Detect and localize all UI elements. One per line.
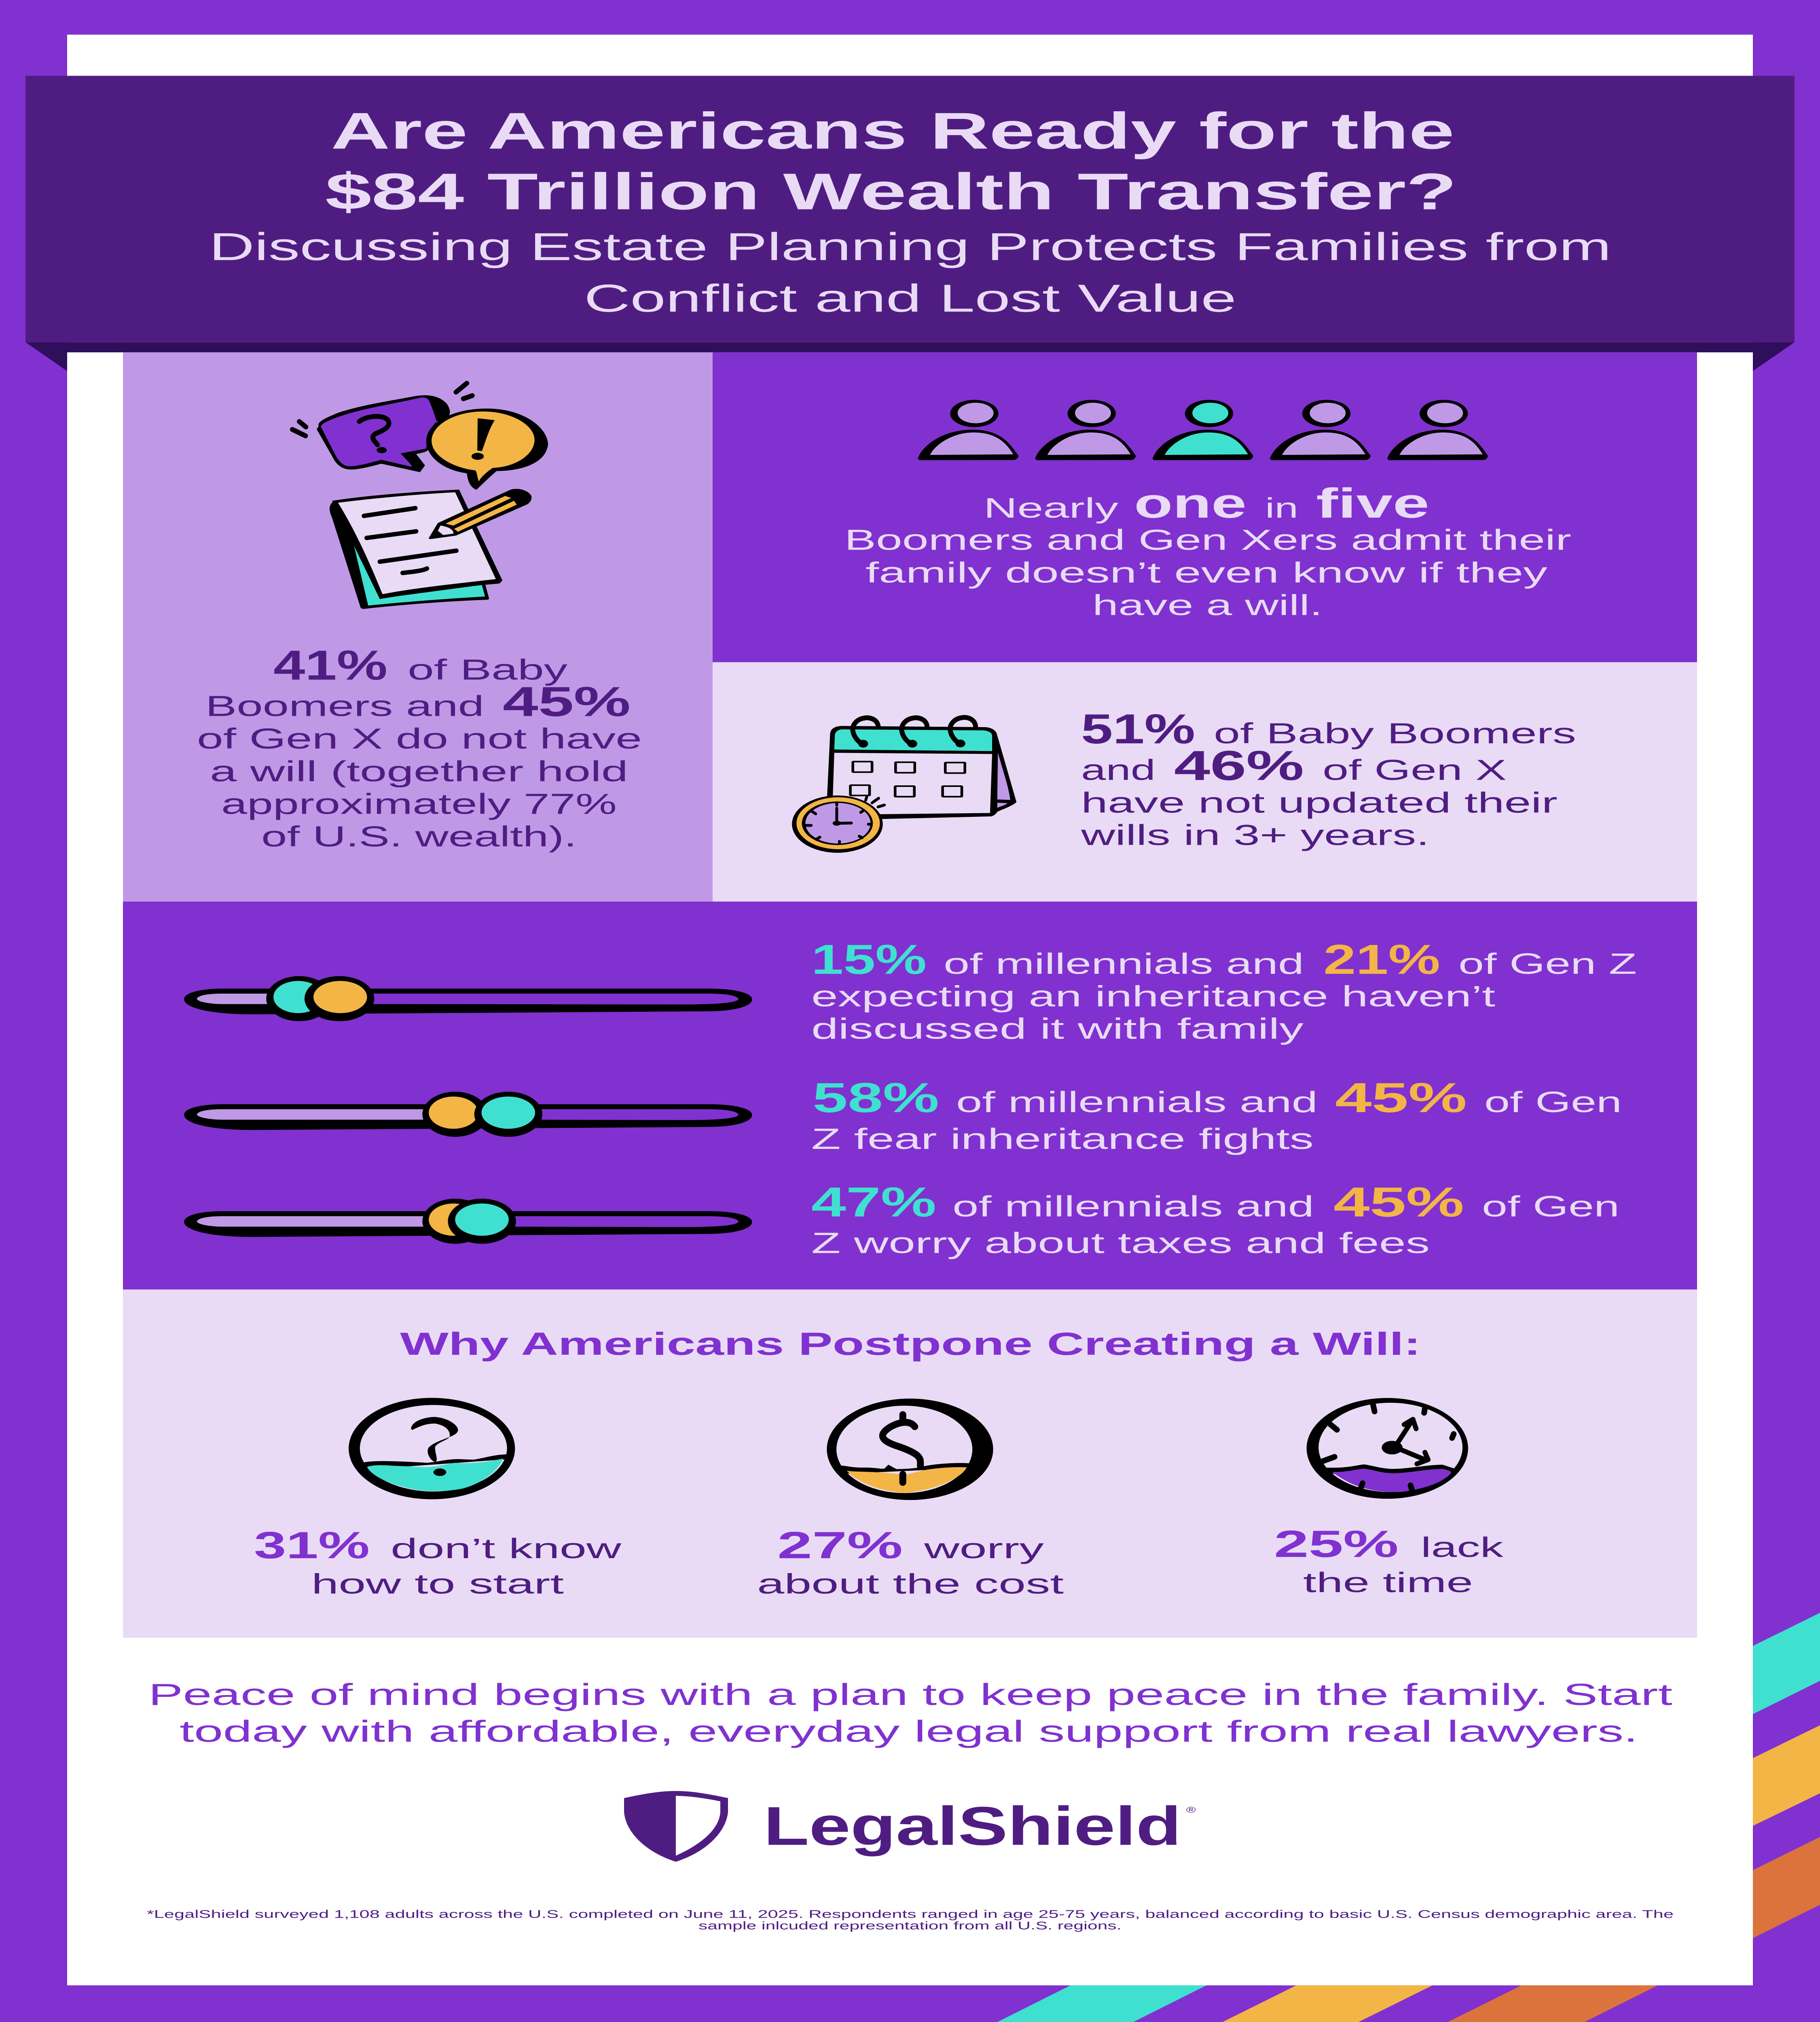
inheritance text 2: 58%: [813, 1074, 939, 1121]
left panel text: of U.S. wealth).: [261, 821, 577, 853]
one in five text: have a will.: [1092, 590, 1323, 622]
logo wordmark: LegalShield: [764, 1796, 1181, 1857]
title: Are Americans Ready for the: [331, 102, 1454, 160]
inheritance text 3: of Gen: [1482, 1190, 1619, 1223]
panel: inheritance sliders: [123, 901, 1697, 1290]
footnote: [147, 1908, 1674, 1932]
one in five text: five: [1316, 480, 1429, 527]
icon: person 5: [1387, 400, 1488, 460]
title: $84 Trillion Wealth Transfer?: [325, 163, 1457, 220]
inheritance text 1: discussed it with family: [811, 1013, 1304, 1045]
stat: 25 percent: lack: [1421, 1531, 1503, 1563]
stat: 31 percent: [254, 1524, 622, 1600]
icon: person 2: [1035, 400, 1136, 460]
icon: shield: [624, 1791, 728, 1862]
inheritance text 1: 21%: [1323, 936, 1440, 983]
wills not updated text: [1081, 706, 1576, 851]
inheritance text 1: of Gen Z: [1458, 948, 1637, 980]
stat: 27 percent: worry: [924, 1532, 1044, 1564]
inheritance text 2: [811, 1074, 1622, 1155]
icon: question bubble: [292, 383, 472, 472]
stat: 27 percent: [757, 1524, 1064, 1600]
left panel text: Boomers and: [205, 690, 484, 722]
icon: pencil: [429, 489, 531, 539]
icon: exclamation bubble: [426, 408, 548, 490]
icon: person 3 highlighted: [1152, 400, 1253, 460]
panel: wills not updated: [713, 662, 1697, 901]
wills not updated text: and: [1081, 754, 1155, 786]
footnote: *LegalShield surveyed 1,108 adults across the U.S. completed on June 11, 2025. Respondents ranged in age 25-75 years, balanced according to basic U.S. Census demographic area. The: [147, 1908, 1674, 1920]
stat: 31 percent: 31%: [254, 1524, 370, 1566]
icon: dollar circle: [827, 1398, 993, 1500]
panel: left will statistic: [123, 352, 713, 901]
wills not updated text: 46%: [1174, 742, 1304, 789]
left panel text: approximately 77%: [221, 788, 617, 820]
stat: 27 percent: 27%: [777, 1524, 903, 1566]
inheritance text 1: of millennials and: [944, 948, 1304, 980]
inheritance text 2: Z fear inheritance fights: [811, 1123, 1314, 1155]
icon: speech bubbles and notepad with pencil: [292, 383, 548, 609]
inheritance text 1: 15%: [811, 936, 927, 983]
icon: question mark circle: [349, 1398, 515, 1499]
stat: 31 percent: don’t know: [391, 1532, 622, 1564]
icon: clock circle: [1307, 1398, 1468, 1499]
one in five text: one: [1134, 480, 1246, 527]
inheritance text 3: 45%: [1333, 1179, 1464, 1226]
inheritance text 3: of millennials and: [952, 1190, 1314, 1223]
call to action text: [148, 1678, 1672, 1748]
icon: calendar: [827, 717, 1016, 819]
left panel text: 45%: [503, 679, 631, 725]
icon: notepad: [330, 490, 502, 609]
left panel text: 41%: [273, 642, 387, 689]
icon: person 4: [1270, 400, 1371, 460]
panel: why Americans postpone: [123, 1290, 1697, 1638]
wills not updated text: wills in 3+ years.: [1081, 819, 1429, 851]
stat: 25 percent: the time: [1303, 1566, 1473, 1598]
inheritance text 3: 47%: [811, 1179, 936, 1226]
icon: row of five people: [918, 400, 1488, 460]
icon: calendar with clock: [792, 717, 1016, 853]
left panel text: of Baby: [408, 654, 568, 686]
inheritance text 1: expecting an inheritance haven’t: [811, 980, 1495, 1013]
one in five text: in: [1265, 492, 1298, 524]
left panel text: of Gen X do not have: [197, 723, 642, 755]
wills not updated text: of Gen X: [1323, 754, 1507, 786]
wills not updated text: 51%: [1081, 706, 1195, 753]
inheritance text 2: of millennials and: [956, 1086, 1318, 1119]
panel: one in five: [713, 352, 1697, 662]
chart: slider 47% and 45%: [184, 1199, 752, 1244]
decorative stripes: [997, 1613, 1820, 2022]
stat: 25 percent: [1274, 1523, 1503, 1598]
one in five text: [844, 480, 1571, 622]
inheritance text 3: Z worry about taxes and fees: [811, 1227, 1430, 1259]
chart: slider 58% and 45%: [184, 1092, 752, 1137]
one in five text: Nearly: [984, 492, 1118, 524]
inheritance text 2: of Gen: [1484, 1086, 1622, 1119]
subtitle: [209, 225, 1611, 320]
stat: 25 percent: 25%: [1274, 1523, 1399, 1565]
left panel text: [197, 642, 642, 853]
stat: 27 percent: about the cost: [757, 1568, 1064, 1600]
logo: LegalShield: ®: [1186, 1806, 1196, 1815]
chart: slider 15% and 21%: [184, 976, 752, 1021]
logo: LegalShield: [624, 1791, 1196, 1862]
call to action text: today with affordable, everyday legal support from real lawyers.: [180, 1714, 1638, 1748]
inheritance text 2: 45%: [1335, 1074, 1467, 1121]
stat: 31 percent: how to start: [311, 1568, 564, 1600]
heading: why Americans postpone: Why Americans Postpone Creating a Will:: [400, 1326, 1421, 1362]
inheritance text 1: [811, 936, 1637, 1045]
wills not updated text: have not updated their: [1081, 787, 1558, 819]
inheritance text 3: [811, 1179, 1619, 1259]
icon: person 1: [918, 400, 1018, 460]
footnote: sample inlcuded representation from all U.S. regions.: [698, 1920, 1122, 1932]
title: [325, 102, 1457, 220]
wills not updated text: of Baby Boomers: [1214, 717, 1576, 750]
one in five text: family doesn’t even know if they: [866, 557, 1548, 589]
icon: clock: [792, 795, 885, 853]
subtitle: Discussing Estate Planning Protects Families from: [209, 225, 1611, 269]
left panel text: a will (together hold: [210, 755, 628, 788]
subtitle: Conflict and Lost Value: [584, 277, 1236, 320]
one in five text: Boomers and Gen Xers admit their: [844, 524, 1571, 556]
title banner: [25, 76, 1795, 371]
call to action text: Peace of mind begins with a plan to keep peace in the family. Start: [148, 1678, 1672, 1712]
